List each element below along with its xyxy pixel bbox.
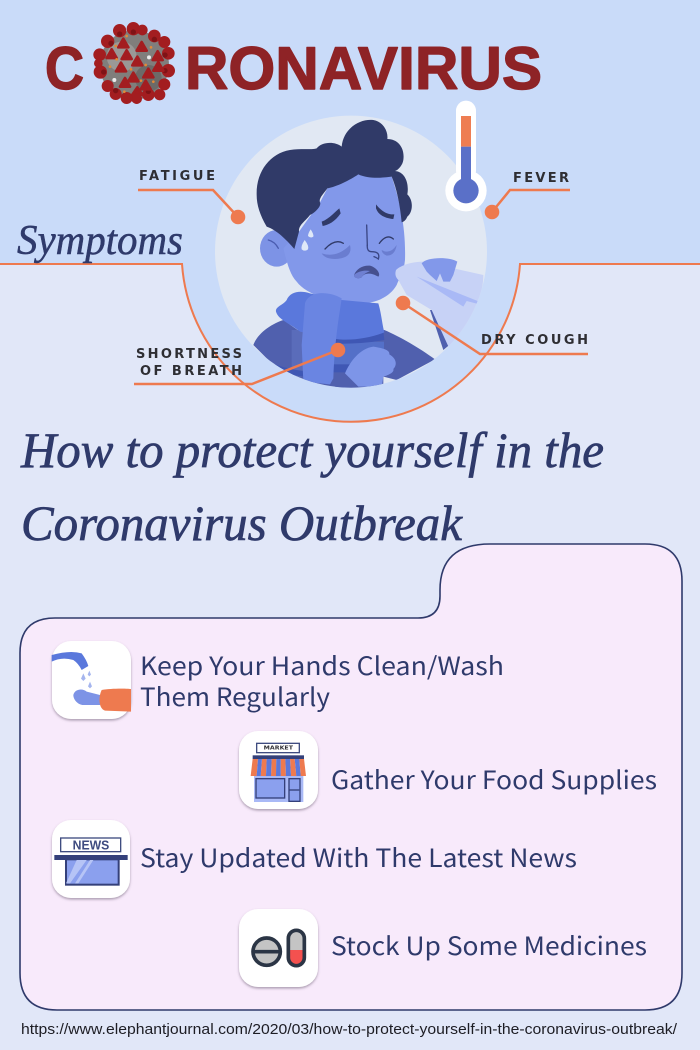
tissue fold xyxy=(417,277,478,307)
callout: shortness of breath: SHORTNESS xyxy=(136,347,242,362)
figure xyxy=(253,174,483,392)
chest panel xyxy=(334,342,384,364)
callout: fever: FEVER xyxy=(513,171,569,186)
panel: protection tips xyxy=(20,544,682,1010)
sleeve piece xyxy=(335,386,356,388)
tip: wash hands xyxy=(52,641,504,719)
tip: medicines xyxy=(239,909,647,987)
callout: dry cough: DRY COUGH xyxy=(481,333,588,348)
callout: fatigue xyxy=(138,169,245,224)
callout: fever xyxy=(485,171,570,219)
icon: news stand xyxy=(52,820,130,898)
tip text: Stay Updated With The Latest News xyxy=(140,839,577,875)
tip text: Them Regularly xyxy=(140,678,330,714)
icon: market: MARKET xyxy=(264,746,294,752)
sleeve line xyxy=(430,310,449,350)
symptoms circle backing xyxy=(182,264,520,422)
lower chest band xyxy=(334,364,350,372)
illustration: sick person xyxy=(215,101,487,392)
sweat drops xyxy=(301,229,313,251)
title: coronavirus wordmark: C xyxy=(45,35,84,102)
tip text xyxy=(140,647,504,714)
hair and face details xyxy=(257,120,412,251)
callout: fatigue: FATIGUE xyxy=(139,169,215,184)
icon: thermometer xyxy=(445,101,487,211)
tip text: Keep Your Hands Clean/Wash xyxy=(140,647,504,683)
closed eyes and nose bridge xyxy=(268,225,393,249)
lower left band xyxy=(274,364,303,376)
title: coronavirus wordmark: RONAVIRUS xyxy=(185,35,542,102)
lower figure xyxy=(253,245,483,392)
callout: shortness of breath: OF BREATH xyxy=(140,364,242,379)
upper figure: ear and face xyxy=(260,174,405,303)
eyebrows xyxy=(322,204,394,226)
heading: symptoms: Symptoms xyxy=(17,218,183,264)
heading: how to protect xyxy=(20,422,604,551)
mouth xyxy=(354,266,379,278)
icon: hand washing xyxy=(52,641,131,719)
icon: market xyxy=(239,731,318,809)
heading: how to protect: Coronavirus Outbreak xyxy=(21,495,463,551)
tip: news xyxy=(52,820,577,898)
tissue xyxy=(395,262,483,350)
nose xyxy=(367,245,379,259)
callout: shortness of breath xyxy=(134,343,345,384)
icon: news stand: NEWS xyxy=(73,838,109,852)
background: lower band xyxy=(0,264,700,1050)
symptoms baseline curve xyxy=(0,264,700,422)
ear xyxy=(260,230,288,267)
tip text: Stock Up Some Medicines xyxy=(331,927,647,963)
source url: https://www.elephantjournal.com/2020/03/how-to-protect-yourself-in-the-coronavirus-outbreak/ xyxy=(21,1021,678,1038)
tip text: Gather Your Food Supplies xyxy=(331,761,657,797)
scarf tail xyxy=(302,293,342,384)
heading: how to protect: How to protect yourself in the xyxy=(20,422,604,478)
tongue xyxy=(354,271,370,278)
tip: food supplies xyxy=(239,731,657,809)
eye bags xyxy=(322,245,397,259)
collar band xyxy=(336,333,384,344)
background: upper band xyxy=(0,0,700,264)
hair xyxy=(257,120,412,249)
icon: pills xyxy=(239,909,318,987)
left sweater panel xyxy=(292,330,303,377)
body xyxy=(253,320,435,392)
icon: virus xyxy=(93,22,175,104)
face xyxy=(283,174,405,303)
hand on tissue xyxy=(422,258,457,282)
callout: dry cough xyxy=(396,296,588,354)
inner circle xyxy=(215,116,487,388)
scarf xyxy=(276,292,384,340)
chest hand xyxy=(345,347,396,387)
